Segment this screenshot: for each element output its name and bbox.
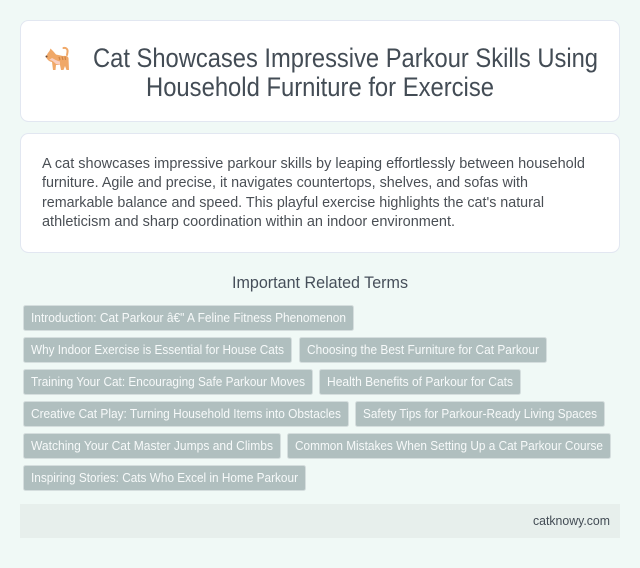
tag: [24, 338, 292, 362]
tag: [300, 338, 546, 362]
heading: related terms: Important Related Terms: [232, 274, 408, 292]
text block: description: A cat showcases impressive parkour skills by leaping effortlessly between household: [42, 155, 585, 172]
panel: title card: [20, 20, 620, 122]
title: Household Furniture for Exercise: [146, 72, 494, 102]
text block: description: furniture. Agile and precise, it navigates countertops, shelves, and sofas with: [42, 174, 528, 191]
tag: Choosing the Best Furniture for Cat Parkour: [307, 342, 540, 357]
tag: Introduction: Cat Parkour â€" A Feline Fitness Phenomenon: [31, 310, 346, 325]
title: [93, 43, 598, 102]
footer: catknowy.com: [533, 513, 610, 528]
tag: Health Benefits of Parkour for Cats: [327, 374, 513, 389]
panel: description card: [20, 134, 620, 252]
tag: Creative Cat Play: Turning Household Items into Obstacles: [31, 406, 341, 421]
tag: [24, 434, 280, 458]
tag: Training Your Cat: Encouraging Safe Parkour Moves: [31, 374, 305, 389]
tag: [24, 402, 348, 426]
tag: Safety Tips for Parkour-Ready Living Spaces: [363, 406, 597, 421]
tag: [320, 370, 520, 394]
tag: Common Mistakes When Setting Up a Cat Parkour Course: [295, 438, 603, 453]
tag: [24, 370, 312, 394]
icon: cat: [46, 48, 69, 70]
text block: description: athleticism and sharp coordination within an indoor environment.: [42, 213, 455, 230]
tag: [24, 306, 354, 330]
tag: Inspiring Stories: Cats Who Excel in Home Parkour: [31, 470, 299, 485]
text block: description: [42, 155, 585, 230]
tag: Why Indoor Exercise is Essential for House Cats: [31, 342, 284, 357]
tag: [288, 434, 610, 458]
tag: [356, 402, 604, 426]
tag list: [24, 306, 610, 490]
footer: [20, 504, 620, 538]
tag: Watching Your Cat Master Jumps and Climbs: [31, 438, 273, 453]
tag: [24, 466, 306, 490]
text block: description: remarkable balance and speed. This playful exercise highlights the cat's natural: [42, 194, 544, 211]
